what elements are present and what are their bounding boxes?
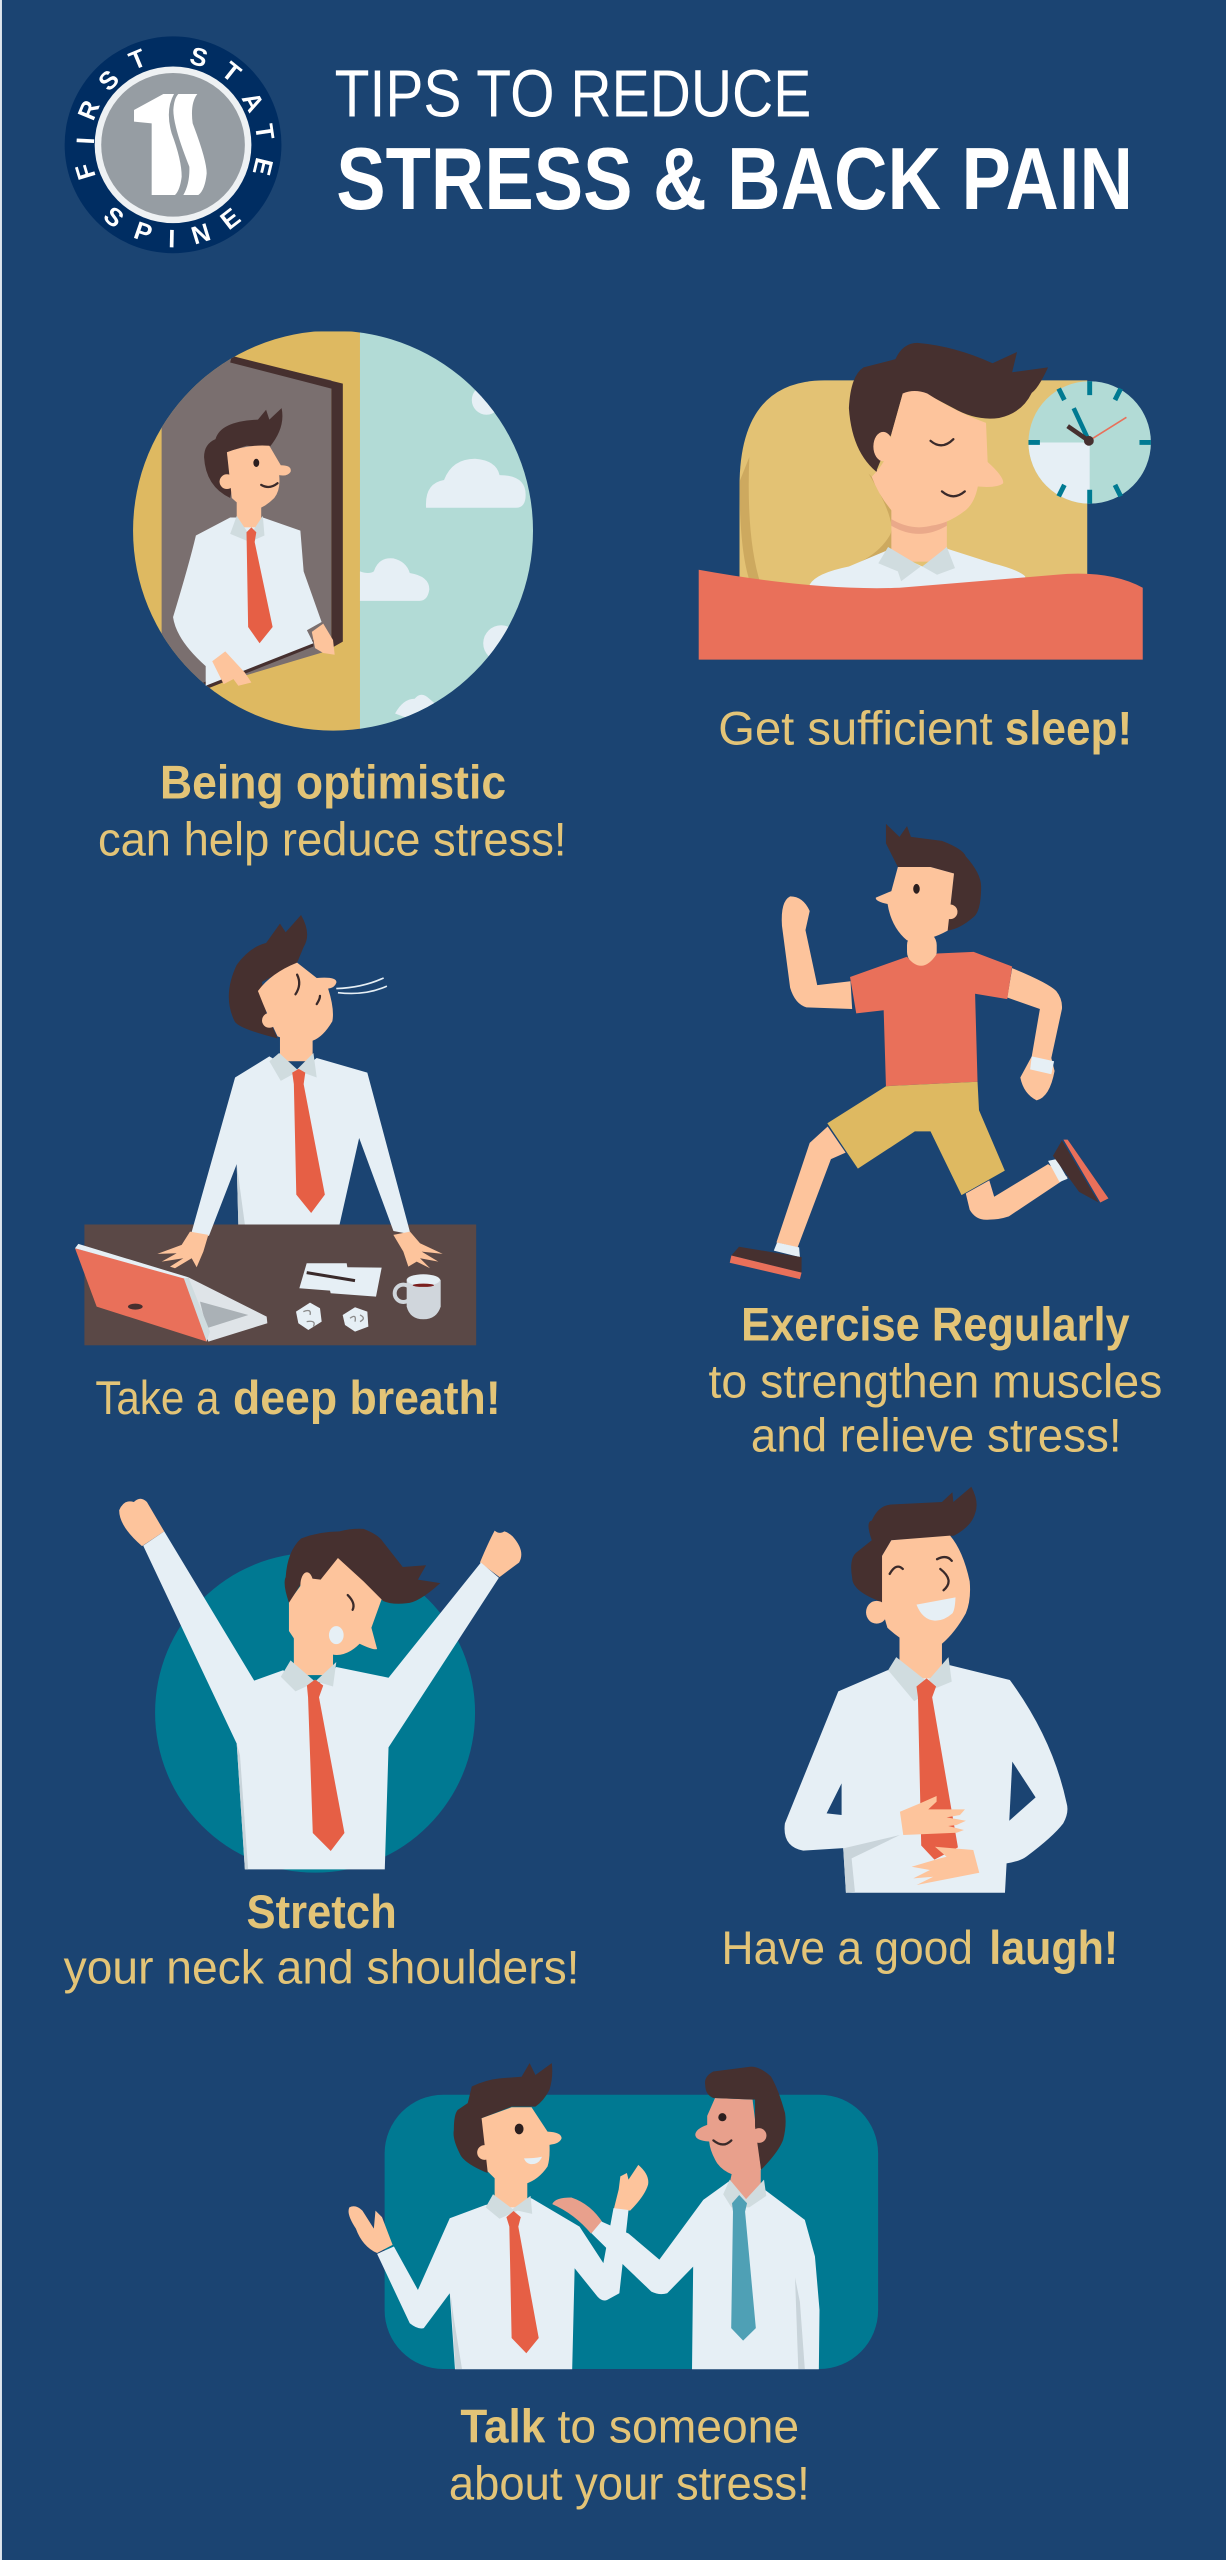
caption: exercise regularly: Exercise Regularly — [741, 1298, 1130, 1351]
illustration: man at open door with sky — [132, 331, 533, 731]
illustration: man breathing at desk — [75, 915, 476, 1345]
caption: talk to someone: about your stress! — [449, 2458, 810, 2511]
panel: good laugh — [722, 1487, 1118, 1975]
logo: First State Spine: F — [70, 160, 102, 183]
panel: talk to someone — [349, 2063, 878, 2511]
caption: being optimistic: Being optimistic — [160, 756, 506, 809]
panel: stretch — [64, 1499, 580, 1995]
caption: sufficient sleep: Get sufficient — [718, 702, 993, 755]
illustration: two men talking — [349, 2063, 878, 2369]
panel: sufficient sleep — [699, 343, 1151, 755]
title — [335, 57, 1133, 228]
caption: good laugh: laugh! — [989, 1922, 1118, 1975]
caption: being optimistic — [98, 756, 566, 867]
logo: First State Spine: T — [125, 44, 151, 76]
logo: First State Spine: T — [216, 57, 246, 89]
caption: stretch — [64, 1886, 580, 1995]
logo: First State Spine: S — [93, 65, 125, 97]
caption: deep breath: deep breath! — [233, 1372, 501, 1425]
panel: being optimistic — [98, 331, 566, 867]
logo: First State Spine: S — [98, 201, 129, 234]
caption: good laugh — [722, 1922, 1118, 1975]
logo: First State Spine: N — [188, 218, 214, 250]
caption: sufficient sleep — [718, 702, 1132, 755]
caption: exercise regularly: to strengthen muscles — [709, 1356, 1162, 1409]
caption: talk to someone — [449, 2400, 810, 2511]
illustration: running man — [730, 824, 1108, 1279]
logo: First State Spine: T — [249, 122, 279, 142]
man on left — [349, 2063, 648, 2369]
caption: talk to someone: Talk — [460, 2400, 546, 2453]
icon: clock — [1028, 381, 1151, 504]
logo: First State Spine: E — [247, 155, 278, 178]
logo: First State Spine: I — [72, 137, 100, 145]
caption: deep breath: Take a — [95, 1372, 220, 1425]
logo: First State Spine — [65, 36, 281, 253]
caption: exercise regularly: and relieve stress! — [751, 1409, 1122, 1462]
man on right — [552, 2067, 820, 2369]
illustration: man stretching — [119, 1499, 521, 1873]
caption: good laugh: Have a good — [722, 1922, 973, 1975]
panel: exercise regularly — [709, 824, 1162, 1462]
title: TIPS TO REDUCE — [335, 57, 811, 132]
logo: First State Spine: R — [73, 97, 106, 124]
logo: First State Spine: E — [215, 203, 246, 235]
logo: First State Spine: A — [236, 87, 269, 117]
logo: First State Spine: I — [168, 225, 175, 253]
desk items — [75, 1232, 443, 1342]
caption: talk to someone: to someone — [557, 2400, 799, 2453]
caption: sufficient sleep: sleep! — [1005, 702, 1132, 755]
illustration: man sleeping with clock — [699, 343, 1151, 660]
caption: exercise regularly — [709, 1298, 1162, 1462]
caption: being optimistic: can help reduce stress! — [98, 814, 566, 867]
illustration: man laughing — [785, 1487, 1067, 1893]
panel: deep breath — [75, 915, 501, 1425]
logo: First State Spine: P — [130, 217, 156, 249]
caption: stretch: your neck and shoulders! — [64, 1942, 580, 1995]
logo: First State Spine: S — [187, 42, 211, 73]
caption: stretch: Stretch — [247, 1886, 397, 1939]
caption: deep breath — [95, 1372, 501, 1425]
